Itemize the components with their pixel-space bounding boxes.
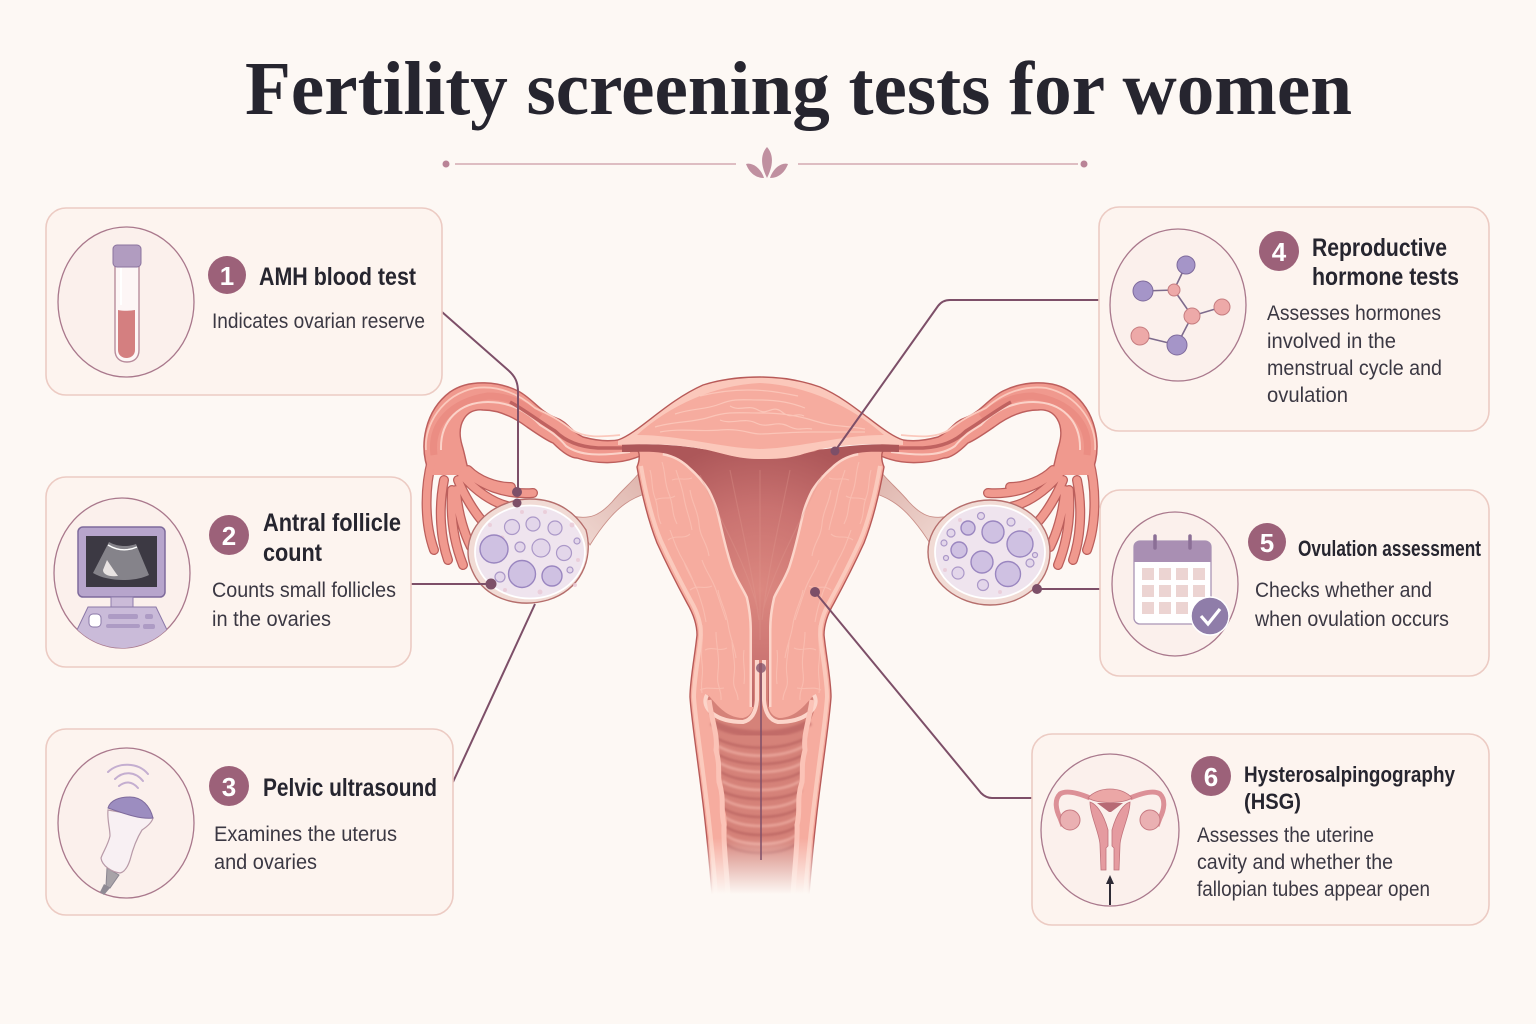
icon: hormone molecule <box>1131 256 1230 355</box>
description 4: Assesses hormones <box>1267 302 1441 325</box>
description 3 <box>214 823 397 874</box>
panel 6: Hysterosalpingography <box>1032 734 1489 925</box>
icon: calendar <box>1134 536 1229 635</box>
description 2 <box>212 579 396 631</box>
description 6: cavity and whether the <box>1197 851 1393 874</box>
leader 1 <box>442 312 522 508</box>
description 6 <box>1197 824 1430 901</box>
leader 6 <box>810 587 1032 798</box>
badge 4 <box>1259 231 1299 271</box>
heading 5: Ovulation assessment <box>1298 536 1482 561</box>
badge 1 <box>208 256 246 294</box>
badge 3 <box>209 766 249 806</box>
badge 5 <box>1248 523 1286 561</box>
panel 2: Antral follicle count <box>46 477 411 667</box>
heading 1: AMH blood test <box>259 263 417 291</box>
panel 3: Pelvic ultrasound <box>46 729 453 915</box>
left ovary <box>468 499 588 603</box>
central anatomy: uterus, tubes and ovaries <box>424 377 1097 904</box>
leader 5 <box>1032 584 1100 594</box>
description 5: when ovulation occurs <box>1254 608 1449 631</box>
description 3: Examines the uterus <box>214 823 397 846</box>
uterine cavity <box>622 444 899 707</box>
heading 6: (HSG) <box>1244 789 1301 814</box>
badge 3: 3 <box>222 772 236 802</box>
right ovary <box>928 500 1050 605</box>
right fallopian tube and uterine wall <box>760 383 1097 895</box>
heading 2: Antral follicle <box>263 509 401 537</box>
heading 2: count <box>263 539 323 567</box>
canal fade <box>690 838 832 904</box>
uterine fundus <box>618 377 903 459</box>
heading 6: Hysterosalpingography <box>1244 762 1456 787</box>
heading 2 <box>263 509 401 567</box>
description 5: Checks whether and <box>1255 579 1432 602</box>
description 4: involved in the <box>1267 330 1396 353</box>
icon: ultrasound monitor <box>76 527 168 650</box>
badge 4: 4 <box>1272 237 1287 267</box>
description 2: Counts small follicles <box>212 579 396 602</box>
description 4: menstrual cycle and <box>1267 357 1442 380</box>
badge 2 <box>209 515 249 555</box>
description 4 <box>1267 302 1442 407</box>
icon: mini uterus with arrow <box>1056 789 1164 905</box>
panel 1: AMH blood test <box>46 208 442 395</box>
description 1: Indicates ovarian reserve <box>212 310 425 333</box>
icon: ultrasound probe <box>100 765 153 895</box>
badge 1: 1 <box>220 261 234 291</box>
description 6: Assesses the uterine <box>1197 824 1374 847</box>
leader 2 <box>411 578 496 590</box>
leader lines <box>411 300 1100 860</box>
description 3: and ovaries <box>214 851 317 874</box>
heading 4 <box>1312 234 1459 291</box>
description 6: fallopian tubes appear open <box>1197 878 1430 901</box>
central pointer line <box>756 663 766 860</box>
panel 4: Reproductive hormone tests <box>1099 207 1489 431</box>
icon: test tube <box>113 245 141 362</box>
badge 2: 2 <box>222 521 236 551</box>
description 2: in the ovaries <box>212 608 331 631</box>
heading 6 <box>1244 762 1456 814</box>
panel 5: Ovulation assessment <box>1100 490 1489 676</box>
badge 5: 5 <box>1260 528 1274 558</box>
heading 3: Pelvic ultrasound <box>263 774 437 802</box>
left fallopian tube and uterine wall <box>424 383 761 895</box>
heading 4: Reproductive <box>1312 234 1447 262</box>
leader 4 <box>830 300 1099 456</box>
badge 6: 6 <box>1204 762 1218 792</box>
heading 4: hormone tests <box>1312 263 1459 291</box>
title divider ornament <box>442 147 1088 178</box>
description 4: ovulation <box>1267 384 1348 407</box>
description 5 <box>1254 579 1449 631</box>
title: Fertility screening tests for women <box>245 47 1352 131</box>
leader 3 <box>453 604 535 782</box>
badge 6 <box>1191 756 1231 796</box>
vaginal canal <box>705 660 816 897</box>
